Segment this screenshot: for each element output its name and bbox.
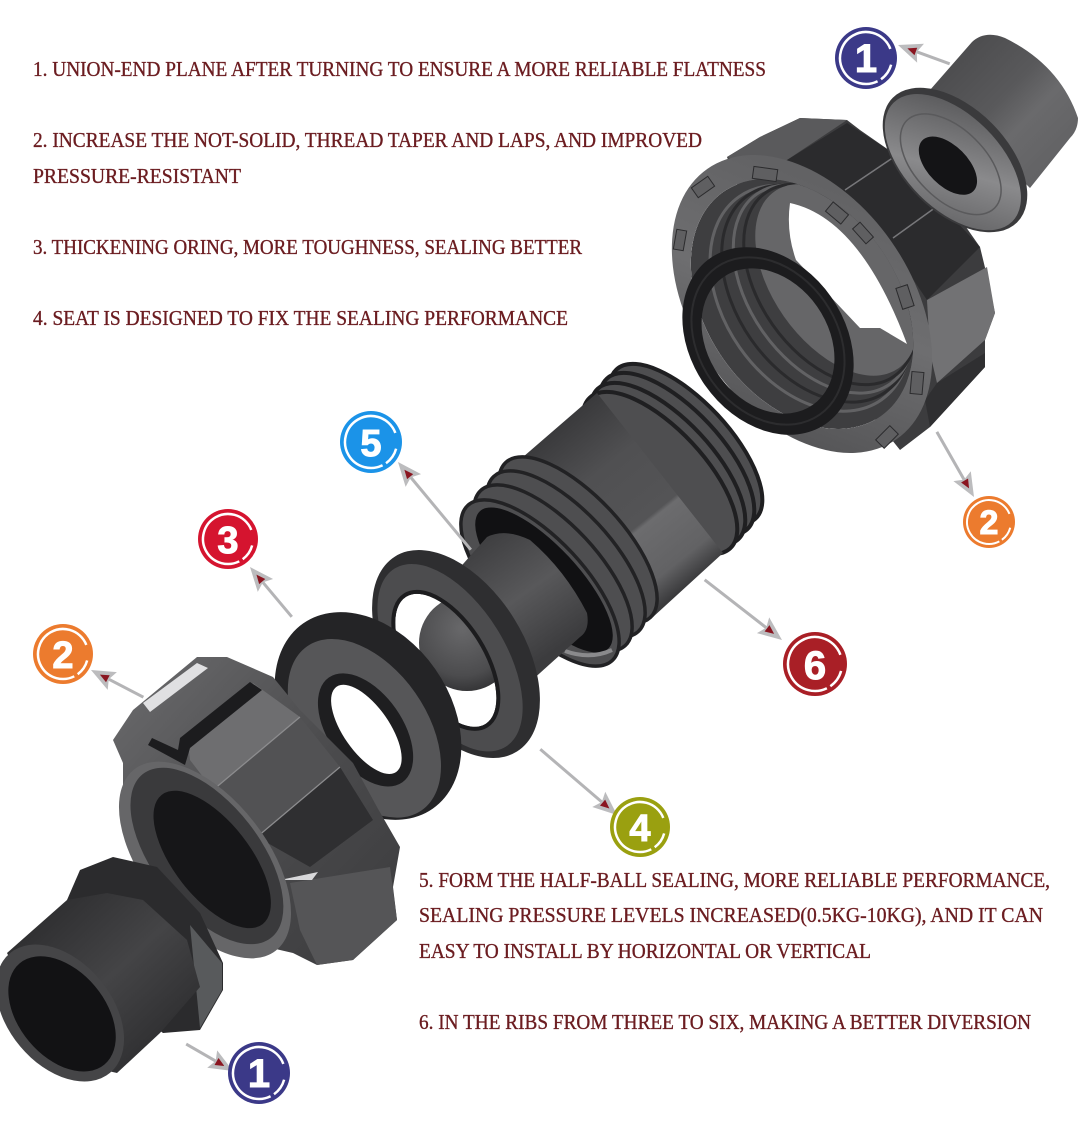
nut ring tabs [673,166,924,448]
arrow: gasket to badge 3 [242,561,299,623]
badge: 2 left: 2 [52,635,74,677]
part: threaded coupling body [436,340,787,691]
feature 2 text: 2. INCREASE THE NOT-SOLID, THREAD TAPER AND LAPS, AND IMPROVED [33,128,702,152]
badge: 3 [197,508,259,570]
feature list: items 5 and 6 [419,868,1050,1034]
feature 6 text: 6. IN THE RIBS FROM THREE TO SIX, MAKING A BETTER DIVERSION [419,1010,1031,1034]
badge: 3: 3 [217,520,239,562]
feature 4 text: 4. SEAT IS DESIGNED TO FIX THE SEALING PERFORMANCE [33,306,568,330]
part: lower end adapter [0,857,223,1106]
part: half-ball stem [419,533,588,700]
arrow: lower adapter to badge 1 [181,1035,238,1080]
feature list: items 1 to 4 [33,57,766,330]
badge: 5: 5 [360,423,382,465]
arrow: upper nut to badge 2 [928,427,983,502]
badge: 2 right [962,495,1016,549]
badge: 4 [609,796,671,858]
arrow: stem to badge 5 [390,456,479,556]
badge: 4: 4 [629,808,651,850]
feature 3 text: 3. THICKENING ORING, MORE TOUGHNESS, SEALING BETTER [33,235,582,259]
badge: 1 bottom [227,1041,291,1105]
arrow: top adapter to badge 1 [895,36,953,73]
badge: 2 left [32,623,94,685]
arrow: coupling to badge 6 [699,572,788,648]
part: upper end adapter [856,35,1078,259]
feature 5 text line 2: SEALING PRESSURE LEVELS INCREASED(0.5KG-10KG), AND IT CAN [419,903,1043,927]
badge: 1 top: 1 [855,37,877,81]
badge: 6: 6 [804,644,826,688]
badge: 2 right: 2 [980,504,998,542]
part: sealing gasket [236,576,500,856]
far thread ribs [558,340,787,578]
near thread ribs [436,432,682,691]
arrow: seat to badge 4 [534,742,624,823]
feature 1 text: 1. UNION-END PLANE AFTER TURNING TO ENSURE A MORE RELIABLE FLATNESS [33,57,766,81]
part: o-ring [647,214,889,468]
feature 2 text continued: PRESSURE-RESISTANT [33,164,241,188]
badge: 1 top [834,26,898,90]
feature 5 text line 3: EASY TO INSTALL BY HORIZONTAL OR VERTICAL [419,939,871,963]
badge: 5 [339,410,403,474]
arrow: lower nut to badge 2 [86,661,148,706]
badge: 1 bottom: 1 [248,1052,270,1096]
part: lower union nut [85,657,400,989]
part: upper union nut [672,118,995,453]
badge: 6 [782,631,848,697]
part: seat ring [337,520,575,788]
